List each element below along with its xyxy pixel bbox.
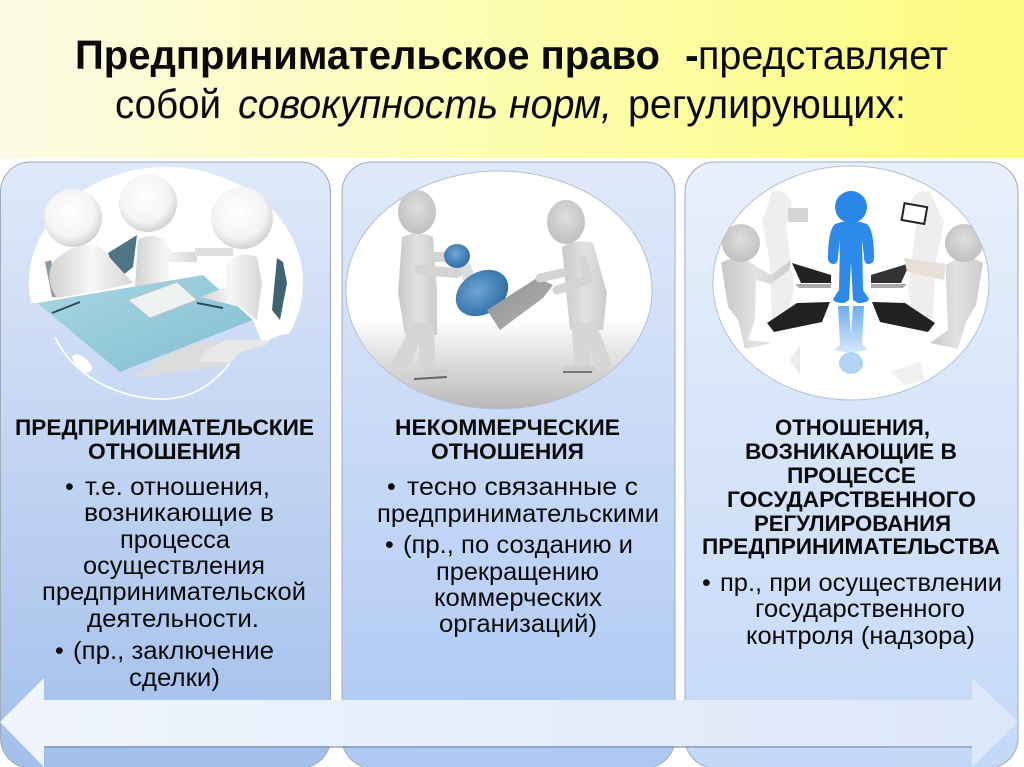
blue figure	[828, 221, 874, 303]
panel: non-commercial relations	[342, 162, 675, 767]
bullet list: прекращению	[436, 558, 599, 586]
bullet list: государственного	[755, 595, 965, 623]
bullet list: предпринимательской	[42, 578, 306, 606]
bullet list: (пр., по созданию и	[403, 531, 633, 559]
bullet list: •	[65, 473, 74, 501]
heading: ПРОЦЕССЕ	[787, 463, 916, 488]
bullet list: организаций)	[439, 610, 597, 638]
header band	[0, 0, 1024, 158]
bullet list	[377, 473, 659, 638]
bullet list: •	[702, 569, 711, 597]
bullet list	[42, 473, 306, 692]
title	[75, 32, 948, 127]
bullet list: (пр., заключение	[73, 637, 274, 665]
bullet list: возникающие в	[84, 499, 274, 527]
heading: НЕКОММЕРЧЕСКИЕ	[395, 415, 620, 440]
bullet list: деятельности.	[87, 605, 259, 633]
heading: ОТНОШЕНИЯ	[88, 439, 241, 464]
heading	[702, 415, 1000, 559]
image: three figures at a table	[29, 167, 303, 399]
title: совокупность норм,	[238, 81, 612, 127]
heading: ПРЕДПРИНИМАТЕЛЬСТВА	[702, 534, 1000, 559]
heading	[395, 415, 620, 464]
heading: ГОСУДАРСТВЕННОГО	[727, 487, 976, 512]
image: two figures with stamp	[346, 171, 652, 409]
bullet list: контроля (надзора)	[746, 622, 975, 650]
title: представляет	[698, 32, 948, 78]
bullet list: •	[385, 531, 394, 559]
bullet list: сделки)	[129, 664, 220, 692]
title: Предпринимательское право	[75, 32, 660, 78]
title: регулирующих:	[628, 81, 906, 127]
heading: ВОЗНИКАЮЩИЕ В	[745, 439, 957, 464]
image: blue figure with arrows	[713, 166, 989, 400]
bullet list: •	[387, 473, 396, 501]
bullet list: процесса	[120, 526, 230, 554]
bullet list: тесно связанные с	[407, 473, 638, 501]
heading: РЕГУЛИРОВАНИЯ	[754, 511, 951, 536]
heading	[15, 415, 314, 464]
heading: ПРЕДПРИНИМАТЕЛЬСКИЕ	[15, 415, 314, 440]
title: -	[685, 32, 699, 78]
double-headed arrow	[0, 678, 1018, 767]
bullet list: пр., при осуществлении	[720, 569, 1002, 597]
bullet list: •	[55, 637, 64, 665]
panel: entrepreneurial relations	[0, 162, 330, 767]
bullet list: предпринимательскими	[377, 500, 659, 528]
reflection	[834, 306, 868, 352]
heading: ОТНОШЕНИЯ,	[775, 415, 930, 440]
bullet list: т.е. отношения,	[85, 473, 270, 501]
panel: state regulation relations	[685, 162, 1018, 767]
bullet list: осуществления	[83, 552, 265, 580]
title: собой	[115, 81, 221, 127]
bullet list: коммерческих	[434, 584, 603, 612]
heading: ОТНОШЕНИЯ	[431, 439, 584, 464]
bullet list	[702, 569, 1002, 650]
